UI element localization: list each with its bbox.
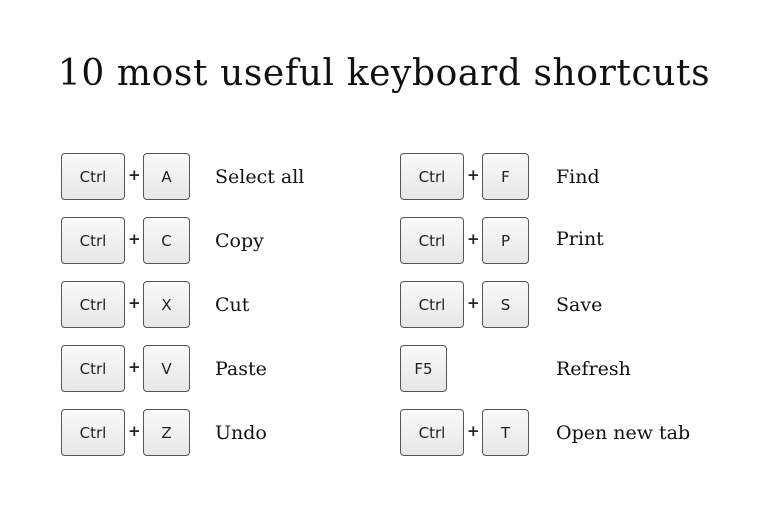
- shortcut: Ctrl+C: Copy: [215, 230, 264, 252]
- shortcut: Ctrl+C: Ctrl: [80, 232, 106, 250]
- shortcut: Ctrl+A: Select all: [215, 166, 304, 188]
- shortcut: Ctrl+T: Open new tab: [556, 422, 690, 444]
- shortcut: Ctrl+V: +: [128, 358, 141, 376]
- shortcut: Ctrl+S: [400, 281, 602, 328]
- shortcut: Ctrl+T: [400, 409, 690, 456]
- shortcut: Ctrl+T: T: [501, 424, 510, 442]
- shortcut: F5: Refresh: [556, 358, 631, 380]
- shortcut: Ctrl+Z: Z: [161, 424, 172, 442]
- shortcut: Ctrl+F: Ctrl: [419, 168, 445, 186]
- shortcut: Ctrl+V: V: [161, 360, 172, 378]
- shortcut: Ctrl+A: Ctrl: [80, 168, 106, 186]
- shortcut: Ctrl+A: +: [128, 166, 141, 184]
- shortcut: Ctrl+Z: Ctrl: [80, 424, 106, 442]
- shortcut: Ctrl+T: +: [467, 422, 480, 440]
- shortcut: Ctrl+A: [61, 153, 304, 200]
- shortcut: Ctrl+V: [61, 345, 267, 392]
- shortcut: Ctrl+T: Ctrl: [419, 424, 445, 442]
- shortcut: Ctrl+V: Paste: [215, 358, 267, 380]
- shortcut: Ctrl+P: +: [467, 230, 480, 248]
- shortcut: Ctrl+X: Ctrl: [80, 296, 106, 314]
- shortcut: Ctrl+X: +: [128, 294, 141, 312]
- shortcut: Ctrl+P: Ctrl: [419, 232, 445, 250]
- shortcut: Ctrl+S: S: [501, 296, 510, 314]
- shortcut: Ctrl+Z: Undo: [215, 422, 267, 444]
- shortcut: Ctrl+C: +: [128, 230, 141, 248]
- shortcut: Ctrl+P: [400, 217, 604, 264]
- shortcut: Ctrl+P: Print: [556, 228, 604, 250]
- shortcut: Ctrl+A: A: [161, 168, 172, 186]
- title: 10 most useful keyboard shortcuts: [58, 53, 710, 94]
- shortcut: Ctrl+X: Cut: [215, 294, 249, 316]
- shortcut: Ctrl+S: Save: [556, 294, 602, 316]
- shortcut: Ctrl+S: Ctrl: [419, 296, 445, 314]
- shortcut: Ctrl+F: Find: [556, 166, 600, 188]
- shortcut: Ctrl+F: [400, 153, 600, 200]
- shortcut: Ctrl+F: F: [501, 168, 510, 186]
- shortcut: Ctrl+Z: [61, 409, 267, 456]
- shortcut: Ctrl+C: C: [161, 232, 172, 250]
- shortcut: Ctrl+Z: +: [128, 422, 141, 440]
- shortcut: F5: [400, 345, 631, 392]
- shortcut: Ctrl+S: +: [467, 294, 480, 312]
- shortcut: Ctrl+P: P: [501, 232, 510, 250]
- shortcut: Ctrl+X: [61, 281, 250, 328]
- shortcut: Ctrl+F: +: [467, 166, 480, 184]
- shortcut: Ctrl+X: X: [161, 296, 172, 314]
- shortcut: Ctrl+C: [61, 217, 264, 264]
- shortcut: F5: F5: [414, 360, 433, 378]
- shortcut: Ctrl+V: Ctrl: [80, 360, 106, 378]
